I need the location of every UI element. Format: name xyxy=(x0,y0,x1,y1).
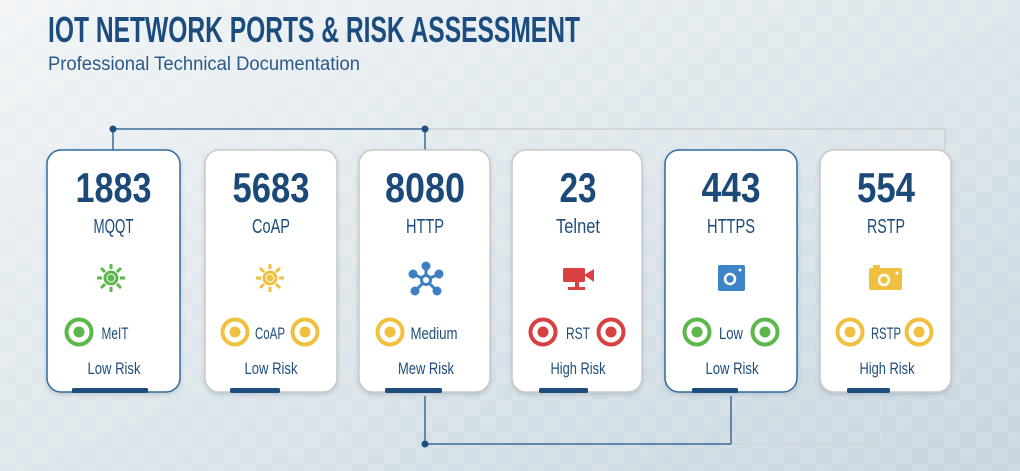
icon: red monitor camera xyxy=(563,268,594,290)
icon: blue network hub xyxy=(410,263,442,294)
connector: bottom xyxy=(422,396,885,448)
icon: yellow sun xyxy=(256,264,284,292)
card: 554 RSTP: High Risk xyxy=(860,359,915,378)
connector: top xyxy=(110,126,945,150)
subtitle: Professional Technical Documentation xyxy=(48,54,360,75)
card: 554 RSTP: RSTP xyxy=(867,216,905,238)
card: 23 Telnet: Telnet xyxy=(556,216,600,238)
card: 8080 HTTP: Mew Risk xyxy=(398,359,454,378)
card: 5683 CoAP: 5683 xyxy=(232,164,310,211)
card: 8080 HTTP: HTTP xyxy=(406,216,444,238)
card: 443 HTTPS: HTTPS xyxy=(707,216,755,238)
icon: yellow camera xyxy=(869,265,902,290)
title: IOT NETWORK PORTS & RISK ASSESSMENT xyxy=(48,9,580,50)
card: 1883 MQQT: Low Risk xyxy=(88,359,141,378)
card: 5683 CoAP: Low Risk xyxy=(244,359,298,378)
card: 23 Telnet: High Risk xyxy=(550,359,606,378)
card: 554 RSTP xyxy=(820,150,951,393)
card: 23 Telnet: RST xyxy=(566,324,590,343)
card: 1883 MQQT: 1883 xyxy=(76,164,152,211)
card: 443 HTTPS: Low xyxy=(719,324,744,343)
card: 443 HTTPS xyxy=(665,150,797,393)
icon: blue camera square xyxy=(718,265,745,291)
card: 8080 HTTP xyxy=(359,150,490,393)
card: 5683 CoAP: CoAP xyxy=(252,216,290,238)
card: 1883 MQQT: MeIT xyxy=(102,324,128,343)
card: 443 HTTPS: 443 xyxy=(702,164,760,211)
card: 443 HTTPS: Low Risk xyxy=(706,359,759,378)
card: 1883 MQQT: MQQT xyxy=(94,216,134,238)
card: 554 RSTP: RSTP xyxy=(871,324,901,343)
card: 8080 HTTP: 8080 xyxy=(385,164,465,211)
card: 1883 MQQT xyxy=(47,150,180,393)
icon: green sun gear xyxy=(97,264,125,292)
card: 8080 HTTP: Medium xyxy=(410,324,458,343)
card: 23 Telnet xyxy=(512,150,642,393)
card: 5683 CoAP xyxy=(205,150,337,393)
card: 5683 CoAP: CoAP xyxy=(255,324,285,343)
card: 23 Telnet: 23 xyxy=(560,164,596,211)
card: 554 RSTP: 554 xyxy=(857,164,916,211)
